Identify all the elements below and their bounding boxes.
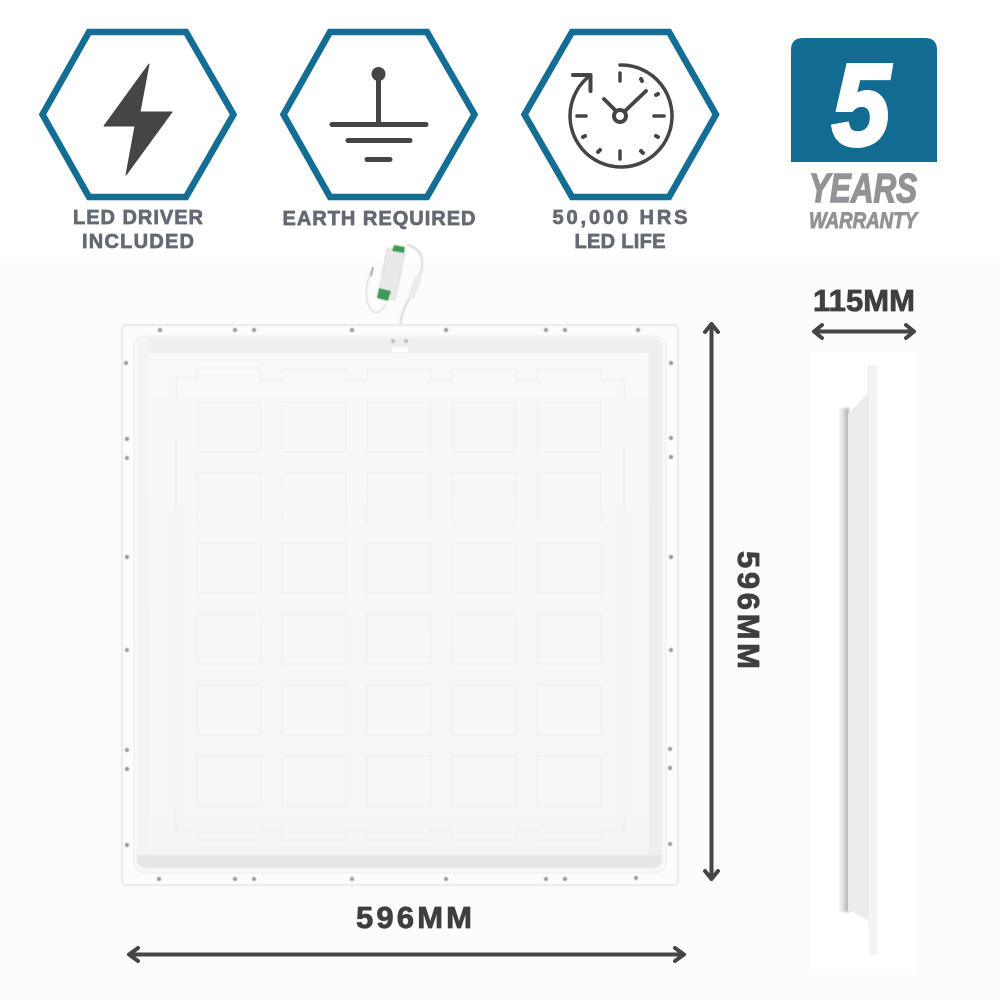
cable socket: [391, 339, 408, 352]
arrow: panel width: [129, 948, 684, 961]
icon: LED driver hexagon: [42, 32, 234, 197]
cable plug: [412, 278, 418, 295]
dimension: height 596mm: [705, 324, 766, 879]
label: earth required: EARTH REQUIRED: [282, 208, 476, 230]
side view of panel: [810, 352, 917, 974]
label: LED driver included: [73, 207, 204, 253]
label: LED driver included: INCLUDED: [82, 231, 194, 253]
dimension: width 596mm: [129, 900, 684, 961]
dimension: height 596mm: 596MM: [731, 551, 766, 669]
warranty badge: [791, 38, 937, 233]
warranty text: warranty: WARRANTY: [809, 208, 919, 233]
label: 50,000 hrs LED life: LED LIFE: [574, 231, 666, 253]
label: LED driver included: LED DRIVER: [73, 207, 204, 229]
LED panel back view: [122, 325, 678, 885]
icon: earth symbol: [332, 67, 426, 160]
icon: clock with arrow: [570, 65, 672, 167]
label: 50,000 hrs LED life: 50,000 HRS: [552, 207, 688, 229]
warranty text: years: YEARS: [809, 165, 917, 211]
arrow: width: [814, 325, 914, 338]
green connector: [392, 245, 405, 253]
arrow: height: [705, 324, 718, 879]
driver body: [378, 248, 405, 300]
page background: [0, 262, 1000, 1000]
side view body: [848, 365, 877, 955]
icon: earth required hexagon: [284, 32, 474, 197]
panel grid of squares: [197, 402, 601, 806]
driver with cable: [366, 245, 422, 342]
panel screws: [124, 328, 673, 881]
icon: LED life hexagon: [524, 32, 716, 197]
icon: lightning bolt: [104, 64, 172, 175]
dimension: width 115mm: [813, 283, 915, 338]
mounting tabs outline: [176, 368, 624, 840]
warranty number: 5: [832, 40, 891, 170]
dimension: width 115mm: 115MM: [813, 283, 915, 318]
recessed rim bands: [137, 338, 662, 868]
dimension: width 596mm: 596MM: [356, 900, 472, 935]
side view shadow: [838, 408, 849, 912]
label: 50,000 hrs LED life: [552, 207, 688, 253]
